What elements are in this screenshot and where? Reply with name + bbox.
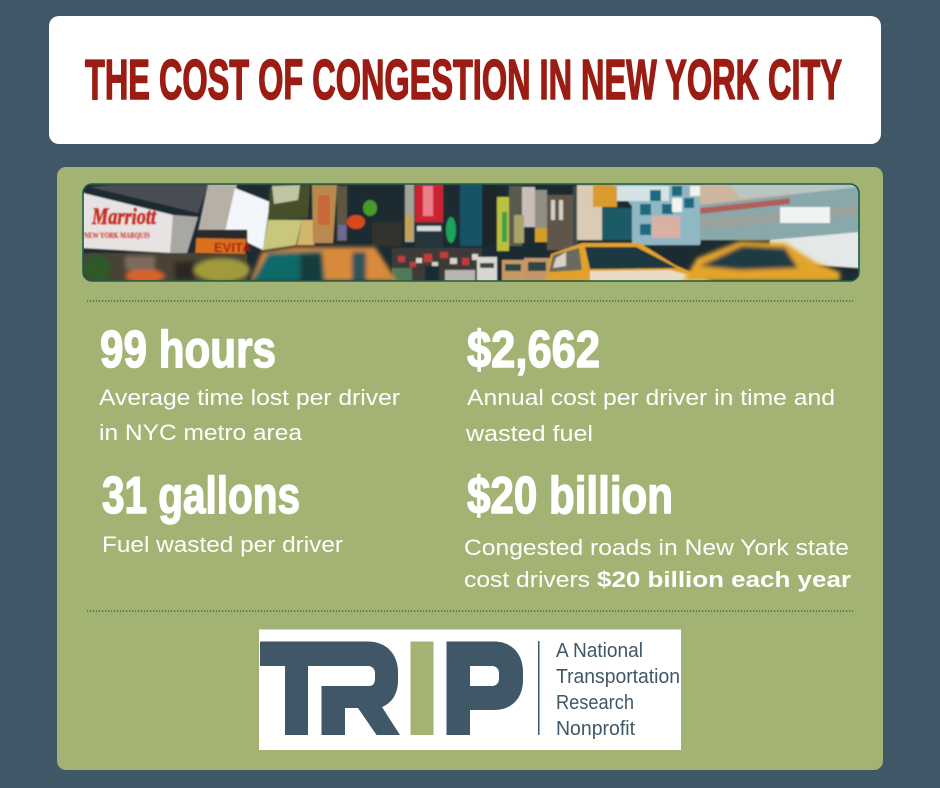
sign: hotel: EVITA — [214, 240, 252, 255]
stat: $20 billion: cost drivers — [464, 567, 590, 592]
stat: 31 gallons: 31 gallons — [102, 467, 300, 525]
divider bottom — [87, 610, 853, 612]
stat: $2,662: $2,662 — [467, 321, 600, 379]
logo letters T R — [260, 642, 400, 735]
logo tagline — [556, 640, 680, 740]
title banner — [49, 16, 881, 144]
stat: 99 hours — [99, 321, 400, 445]
stat: $2,662: Annual cost per driver in time and — [467, 385, 835, 410]
sign: hotel: NEW YORK MARQUIS — [84, 231, 150, 240]
stat: 99 hours: Average time lost per driver — [99, 385, 400, 410]
stat: $20 billion: $20 billion — [467, 467, 673, 525]
stat: $20 billion: Congested roads in New York state — [464, 535, 849, 560]
logo tagline: Nonprofit — [556, 718, 635, 740]
logo letter P — [446, 642, 523, 735]
stat: $20 billion — [464, 467, 852, 592]
logo: TRIP — [259, 630, 681, 750]
stat: $2,662: wasted fuel — [465, 421, 593, 446]
stat: 31 gallons: Fuel wasted per driver — [102, 532, 343, 557]
stat: $2,662 — [465, 321, 835, 446]
stat: 99 hours: in NYC metro area — [99, 420, 303, 445]
logo tagline: Transportation — [556, 666, 680, 688]
stat: $20 billion: $20 billion each year — [597, 567, 852, 592]
logo letter I — [410, 642, 434, 735]
sign: hotel — [84, 204, 252, 255]
panel: statistics — [57, 167, 883, 770]
logo tagline: A National — [556, 640, 643, 662]
stat: 31 gallons — [102, 467, 343, 557]
logo tagline: Research — [556, 692, 634, 714]
stat: 99 hours: 99 hours — [100, 321, 276, 379]
divider top — [87, 300, 853, 302]
photo: Times Square traffic — [83, 184, 859, 283]
sign: hotel: Marriott — [91, 204, 156, 229]
